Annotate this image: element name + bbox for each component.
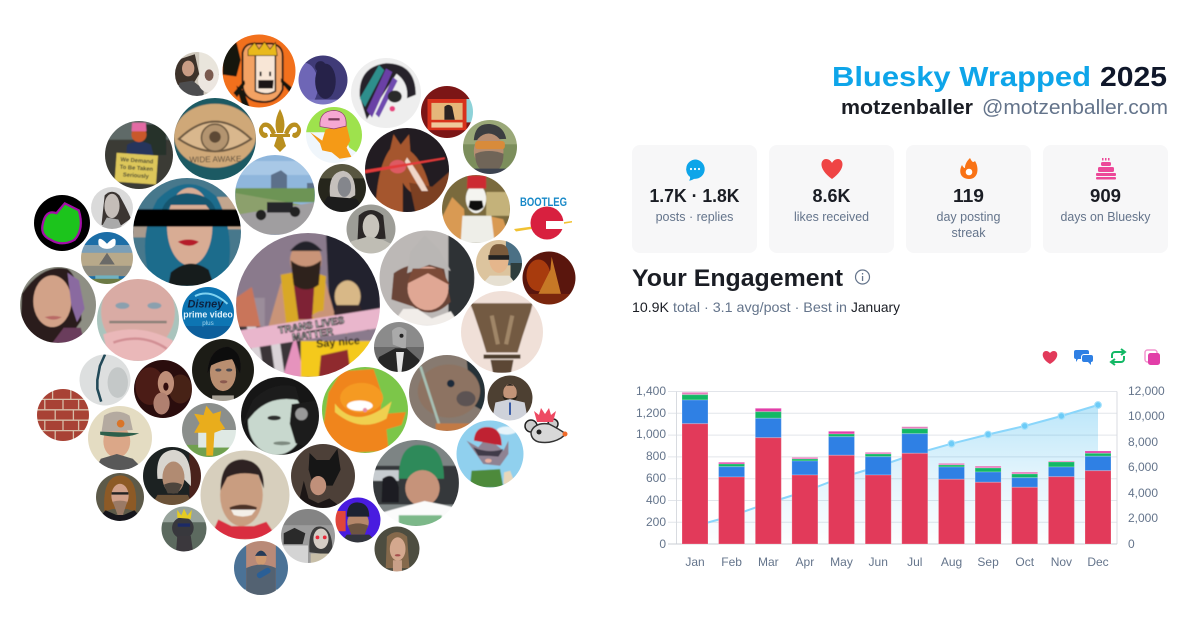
- avatar: man giving thumbs up: [488, 376, 532, 420]
- month labels: Apr: [796, 555, 814, 569]
- avatar: man in blue jacket: [226, 533, 296, 603]
- avatar: woman in cat hood: [281, 434, 365, 518]
- panel: days on Bluesky: [1043, 145, 1168, 253]
- stat value and label: 1.7K · 1.8K: [650, 186, 740, 206]
- bar: December: [1085, 451, 1111, 544]
- engagement summary: 10.9K: [632, 299, 670, 315]
- avatar: fleur-de-lis: [259, 109, 301, 152]
- left axis labels: 600: [646, 471, 666, 485]
- avatar: pale face through glass: [97, 279, 179, 361]
- avatar: Louvre with butterfly: [81, 232, 133, 284]
- stat value and label: day posting: [937, 210, 1001, 224]
- left axis labels: 1,000: [636, 427, 666, 441]
- panel: likes received: [769, 145, 894, 253]
- avatar: bearded man with sunglasses: [463, 120, 517, 174]
- left axis labels: 800: [646, 449, 666, 463]
- icon: birthday cake: [1096, 158, 1116, 180]
- bar: March: [755, 408, 781, 544]
- avatar: Garfield: [322, 367, 408, 453]
- avatar: sun mascot with soccer team: [182, 403, 236, 457]
- month labels: Nov: [1051, 555, 1072, 569]
- month labels: Jul: [907, 555, 922, 569]
- avatar: big group photo with banner: [236, 233, 380, 377]
- icon: reposts: [1111, 349, 1125, 365]
- avatar: man in green helmet: [360, 427, 472, 539]
- avatar: screaming figure: [134, 360, 192, 418]
- month labels: Oct: [1015, 555, 1035, 569]
- chart: monthly engagement: [636, 384, 1165, 569]
- avatar: Bootleg G logo: BOOTLEG: [520, 197, 567, 209]
- bar: September: [975, 466, 1001, 544]
- month labels: Jun: [869, 555, 888, 569]
- left axis labels: [636, 384, 666, 551]
- bar: June: [865, 452, 891, 544]
- right axis labels: 6,000: [1128, 460, 1158, 474]
- icon: info: [856, 270, 870, 284]
- stat value and label: [650, 186, 740, 224]
- right axis labels: 0: [1128, 537, 1135, 551]
- left axis labels: 1,200: [636, 406, 666, 420]
- bar: July: [902, 427, 928, 544]
- avatar: crow: [298, 56, 348, 104]
- avatar cloud: [9, 24, 583, 603]
- avatar: girl in tiara: [380, 230, 474, 326]
- bar: November: [1048, 461, 1074, 544]
- avatar: sign-holding protester: [105, 121, 173, 189]
- title: Bluesky Wrapped: [832, 61, 1091, 92]
- panel: day posting streak: [906, 145, 1031, 253]
- bar: August: [938, 463, 964, 544]
- avatar: hot dog king: [222, 34, 296, 108]
- stat value and label: [794, 186, 869, 224]
- avatar: suited figure in grayscale: [374, 322, 424, 372]
- avatar: smiling man with mustache: [187, 437, 303, 553]
- avatar: young woman: [368, 520, 426, 578]
- avatar: crack in white surface: [80, 354, 130, 406]
- avatar: orange cat in helmet: [306, 107, 362, 163]
- avatar: woman with red eyes: [273, 501, 343, 571]
- month labels: [685, 555, 1109, 569]
- avatar: man in cap with neon lights: [329, 491, 387, 549]
- avatar: gray-haired man: [134, 438, 210, 514]
- icon: flame: [960, 158, 977, 179]
- icon: quotes: [1145, 350, 1160, 365]
- avatar: grayscale portrait: [346, 204, 396, 254]
- cumulative line: [695, 402, 1101, 526]
- avatar: wide awake eye: [174, 98, 256, 180]
- stat value and label: streak: [951, 226, 986, 240]
- avatar: Corinthian column: [461, 291, 543, 373]
- avatar: blonde with neon glitch: [318, 164, 366, 212]
- profile name and handle: @motzenballer.com: [982, 97, 1168, 119]
- bar: October: [1012, 472, 1038, 544]
- avatar: Bootleg G logo: [514, 197, 572, 240]
- avatar: red poster: [421, 86, 473, 138]
- avatar: woman in scarf: [20, 267, 96, 343]
- avatar: grayscale girl close-up: [241, 377, 319, 455]
- bar: February: [719, 462, 745, 544]
- avatar: horse with laser eyes: [365, 128, 449, 212]
- avatar: Hank Hill: [476, 240, 522, 286]
- left axis labels: 0: [659, 537, 666, 551]
- title: [832, 61, 1167, 92]
- stacked bars: [682, 392, 1111, 544]
- icon: replies: [1074, 350, 1093, 365]
- month labels: Feb: [721, 555, 742, 569]
- right axis labels: 2,000: [1128, 511, 1158, 525]
- avatar: poodle with crown: [155, 500, 213, 558]
- right axis labels: [1128, 384, 1165, 551]
- stat value and label: 8.6K: [812, 186, 850, 206]
- cumulative area: [695, 405, 1098, 544]
- profile name and handle: [841, 97, 1168, 119]
- stat value and label: likes received: [794, 210, 869, 224]
- left axis labels: 400: [646, 493, 666, 507]
- icon: likes: [1043, 351, 1057, 364]
- avatar: opossum with mohawk: [525, 408, 568, 442]
- avatar: blue-haired woman with censor bar: [133, 178, 241, 286]
- avatar: Disney prime video: [182, 287, 234, 339]
- avatar: streaked hair drawing: [351, 58, 421, 128]
- avatar: smiling man in cap: [88, 406, 152, 470]
- engagement summary: [632, 299, 900, 315]
- avatar: grayscale woman: [91, 187, 133, 229]
- icon: speech bubble: [686, 160, 705, 181]
- avatar: brick wall: [37, 389, 89, 441]
- engagement summary: total · 3.1 avg/post · Best in: [673, 299, 847, 315]
- month labels: Mar: [758, 555, 779, 569]
- heading: Your Engagement: Your Engagement: [632, 265, 843, 292]
- avatar: doll-like woman: [192, 339, 254, 401]
- avatar: raccoon in red beanie: [456, 420, 524, 488]
- right axis labels: 8,000: [1128, 435, 1158, 449]
- stat value and label: [1060, 186, 1151, 224]
- month labels: Sep: [977, 555, 999, 569]
- right axis labels: 10,000: [1128, 409, 1165, 423]
- month labels: Aug: [941, 555, 962, 569]
- stat value and label: [937, 186, 1001, 240]
- avatar: woman with dog: [175, 52, 219, 96]
- panel: posts and replies: [632, 145, 757, 253]
- icon: heart: [821, 159, 843, 179]
- right axis labels: 4,000: [1128, 486, 1158, 500]
- left axis labels: 200: [646, 515, 666, 529]
- month labels: May: [830, 555, 853, 569]
- month labels: Jan: [685, 555, 705, 569]
- title: 2025: [1100, 61, 1167, 92]
- month labels: Dec: [1087, 555, 1109, 569]
- right axis labels: 12,000: [1128, 384, 1165, 398]
- avatar: green and magenta shape: [34, 195, 90, 251]
- engagement summary: January: [851, 299, 900, 315]
- bar: May: [828, 431, 854, 544]
- avatar: city with bike: [235, 155, 315, 235]
- stat value and label: 119: [953, 186, 984, 206]
- chart legend icons: [1043, 349, 1160, 365]
- stat value and label: 909: [1090, 186, 1121, 206]
- avatar: fiery red scene: [522, 252, 576, 304]
- stat value and label: days on Bluesky: [1060, 210, 1151, 224]
- avatar: man with long red hair: [89, 466, 151, 528]
- profile name and handle: motzenballer: [841, 97, 973, 119]
- left axis labels: 1,400: [636, 384, 666, 398]
- bar: April: [792, 457, 818, 544]
- avatar: clown in tank top: [442, 175, 510, 243]
- stat value and label: posts · replies: [656, 210, 733, 224]
- bar: January: [682, 392, 708, 544]
- avatar: groundhog: [409, 355, 485, 431]
- gridlines: [668, 392, 1117, 544]
